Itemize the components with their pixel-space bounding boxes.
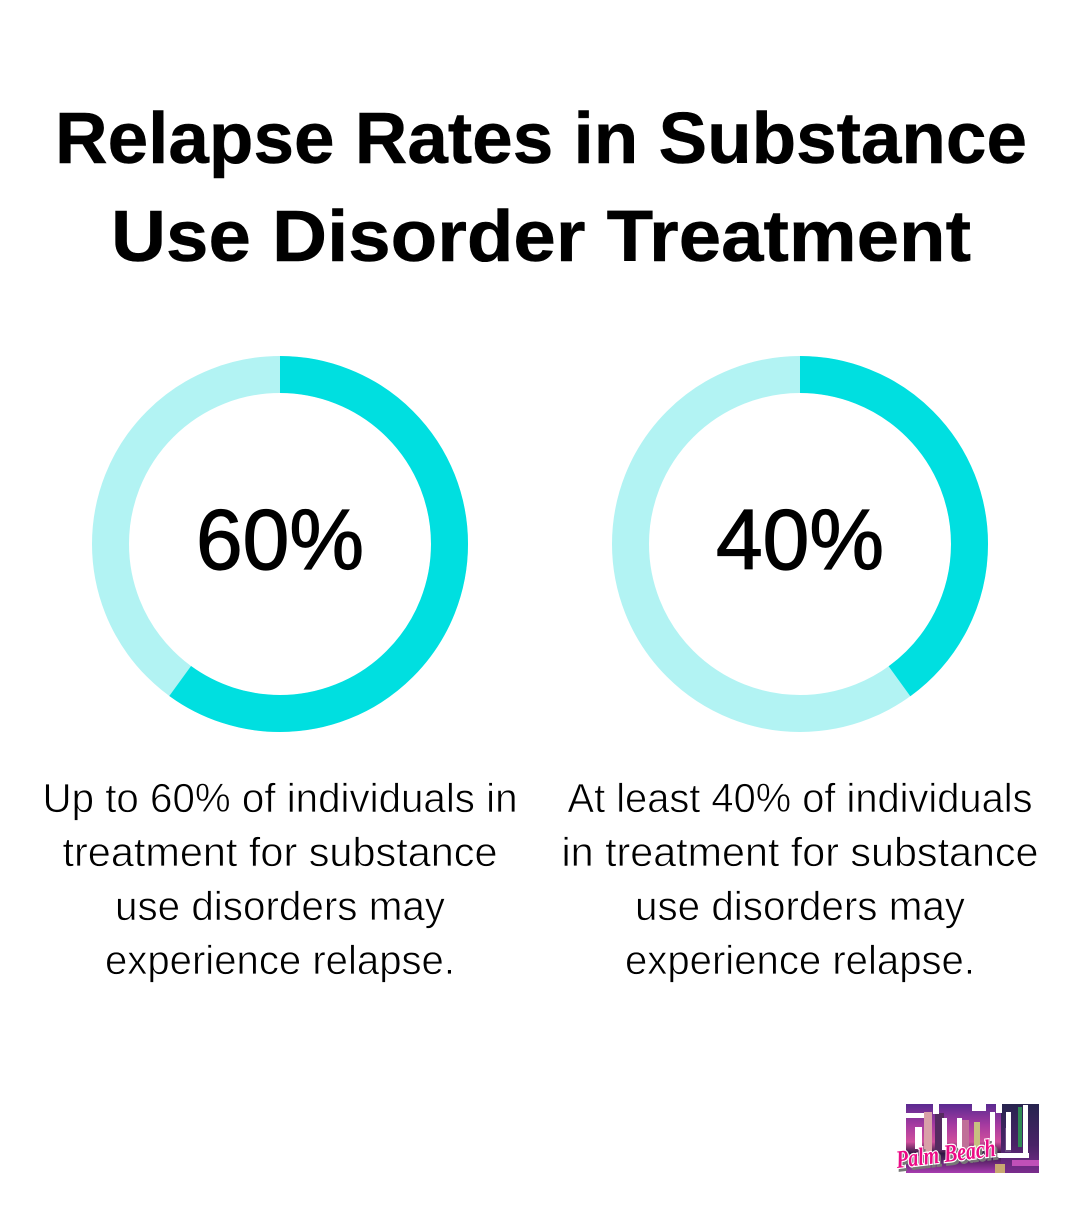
donut chart: 40% <box>630 374 970 714</box>
description: 40%: At least 40% of individuals <box>568 775 1032 821</box>
logo script: Palm Beach: Palm Beach <box>894 1135 997 1174</box>
panel: 40 percent <box>562 374 1038 983</box>
description: 60%: treatment for substance <box>62 829 498 875</box>
title <box>55 99 1027 277</box>
description: 40%: in treatment for substance <box>562 829 1038 875</box>
description: 60%: Up to 60% of individuals in <box>42 775 518 821</box>
description: 60%: use disorders may <box>115 883 445 929</box>
description: 40%: experience relapse. <box>625 937 975 983</box>
block letter gaps <box>906 1100 1029 1158</box>
value: 40%: 40% <box>716 493 884 588</box>
title: Use Disorder Treatment <box>111 197 971 277</box>
logo script: Palm Beach: Palm Beach <box>896 1138 999 1177</box>
description: 60%: experience relapse. <box>105 937 455 983</box>
logo: Amity Palm Beach <box>894 1100 1039 1177</box>
description: 40% <box>562 775 1038 983</box>
donut chart: 60% <box>110 374 450 714</box>
description: 60% <box>42 775 518 983</box>
panel: 60 percent <box>42 374 518 983</box>
title: Relapse Rates in Substance <box>55 99 1027 179</box>
value: 60%: 60% <box>196 493 364 588</box>
description: 40%: use disorders may <box>635 883 965 929</box>
